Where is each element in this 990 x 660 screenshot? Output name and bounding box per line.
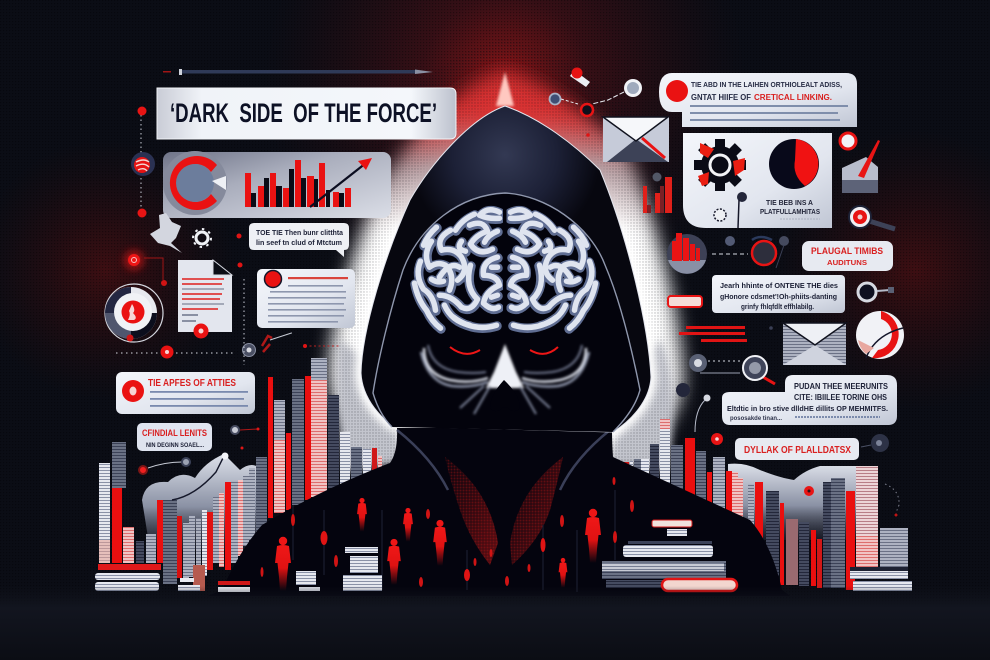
title banner	[157, 88, 456, 139]
pill: dyllak: DYLLAK OF PLALLDATSX	[744, 445, 851, 456]
title text: ‘DARK SIDE OF THE FORCE’	[170, 98, 437, 128]
note panel	[257, 269, 355, 328]
magnifier connector	[676, 354, 775, 432]
envelope icon	[603, 117, 669, 162]
text panel: jearh	[712, 275, 845, 313]
cloak silhouette	[208, 428, 790, 596]
text panel: jearh: gHonore cdsmet'!Oh-phiits-danting	[720, 292, 837, 301]
left column icons	[124, 106, 242, 286]
text panel: jearh: Jearh hhinte of ONTENE THE dies	[720, 281, 838, 290]
top speech panel: GNTAT HIIFE OF	[691, 93, 751, 102]
mini red chart	[643, 177, 672, 213]
hood opening	[373, 193, 640, 432]
info panel: criminal limits: NIN DEGINN SOAEL...	[146, 442, 204, 449]
icon: glowing dot	[124, 250, 144, 270]
pill: plaugal	[802, 241, 893, 271]
brain	[414, 205, 596, 337]
round bar icon	[667, 233, 707, 274]
text panel: pudan	[722, 375, 897, 425]
magnifier	[849, 206, 895, 229]
envelope with pencil	[842, 140, 880, 193]
bar chart: left skyline	[99, 358, 382, 584]
trend arrow	[310, 158, 372, 207]
hood halo	[338, 72, 672, 472]
hood opening edge	[373, 193, 640, 432]
info panel: apfes	[116, 372, 255, 414]
icon: striped target	[131, 152, 155, 176]
info panel: apfes: TIE APFES OF ATTIES	[148, 377, 236, 389]
donut icon	[163, 151, 227, 215]
skull face	[421, 344, 589, 414]
top speech panel	[659, 73, 857, 127]
stacks of books	[95, 520, 912, 592]
bar group	[245, 160, 351, 207]
top speech panel: TIE ABD IN THE LAIHEN ORTHIOLEALT ADISS,	[691, 80, 842, 89]
gear and pie panel	[683, 133, 832, 228]
right side icons	[643, 133, 895, 274]
icon: map	[150, 213, 182, 253]
pie icon right	[856, 311, 904, 359]
envelope icon lower	[783, 323, 846, 365]
chart panel	[163, 151, 391, 218]
icon: gear	[193, 229, 211, 247]
text panel: pudan: PUDAN THEE MEERUNITS	[794, 381, 888, 391]
top speech panel: CRETICAL LINKING.	[754, 93, 832, 102]
pill: plaugal: AUDITUNS	[827, 258, 867, 267]
bar chart: right skyline	[623, 419, 908, 590]
pie chart	[769, 139, 819, 189]
red ring	[752, 237, 776, 265]
info panel: criminal limits	[137, 423, 212, 451]
gear icon	[694, 139, 746, 191]
hood	[361, 106, 651, 432]
red human figures	[260, 477, 634, 592]
gear and pie panel: PLATFULLAMHITAS	[760, 207, 820, 216]
left cloud	[142, 454, 262, 550]
document icon	[178, 260, 232, 338]
trend line on left cloud	[139, 426, 260, 500]
gear and pie panel: TIE BEB INS A	[766, 198, 814, 207]
red pill and lines	[668, 296, 773, 342]
ring connector icon	[858, 283, 894, 301]
small accents near pill	[711, 433, 899, 516]
text panel: pudan: pososakde tinan...	[730, 416, 782, 422]
right cloud	[728, 464, 856, 540]
ground	[0, 586, 990, 660]
pill: plaugal: PLAUGAL TIMIBS	[811, 246, 883, 257]
hooded figure	[361, 106, 651, 432]
cloak red lining	[397, 430, 610, 565]
info panel: criminal limits: CFINDIAL LENITS	[142, 428, 207, 439]
text panel: pudan: CITE: IBIILEE TORINE OHS	[794, 393, 888, 402]
pen line	[163, 69, 433, 75]
speech bubble: lin seef tn clud of Mtctum	[256, 238, 342, 247]
speech bubble: TOE TIE Then bunr clitthta	[256, 228, 344, 237]
text panel: pudan: Eltdtic in bro stive dlldHE dillits OP MEHMITFS.	[727, 404, 888, 413]
circular badge icon	[105, 284, 163, 342]
top right connector icons	[550, 68, 642, 137]
text panel: jearh: grinfy fhlqfdlt effhlabilg.	[741, 302, 814, 311]
target ring	[840, 133, 856, 149]
dotted connector row	[116, 279, 340, 365]
speech bubble	[249, 223, 349, 257]
pill: dyllak	[735, 438, 859, 460]
